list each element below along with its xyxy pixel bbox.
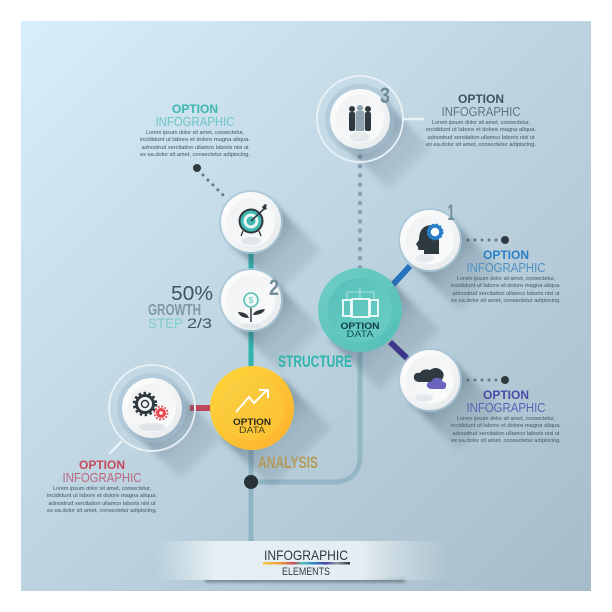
label: option data	[340, 321, 380, 340]
text block: target	[140, 102, 250, 158]
icon: people	[349, 105, 371, 131]
icon: growth plant: $	[249, 296, 254, 305]
node: target	[219, 190, 322, 293]
text block: gears: adnostrud xercitation ullamco laboris nisi ut	[48, 501, 156, 507]
node: plant	[219, 268, 322, 371]
growth stat: 50%	[171, 283, 213, 305]
step numbers: 2	[269, 275, 279, 300]
text block: cloud: Lorem ipsum dolor sit amet, consectetur,	[457, 416, 555, 422]
text block: target: ex ea.dolor sit amet, consectetur adipiscing.	[140, 152, 250, 158]
leader: head	[468, 236, 509, 244]
node: people	[317, 76, 431, 190]
label: option data: OPTION	[340, 321, 380, 332]
footer title: INFOGRAPHIC	[264, 547, 348, 563]
text block: target: INFOGRAPHIC	[156, 115, 234, 129]
connector lines	[190, 157, 411, 541]
node: cloud	[398, 348, 501, 451]
text block: gears: OPTION	[79, 458, 125, 472]
step numbers: 3	[380, 83, 390, 108]
step numbers	[269, 83, 454, 300]
step numbers: 1	[448, 200, 454, 225]
text block: gears	[47, 458, 157, 514]
icon: clouds	[414, 368, 446, 389]
icon: gears	[134, 393, 168, 420]
heading: analysis: ANALYSIS	[258, 453, 318, 472]
text block: head: INFOGRAPHIC	[466, 261, 546, 275]
text block: head: adnostrud xercitation ullamco laboris nisi ut	[452, 291, 560, 297]
text block: people: incididunt ut labore et dolore magna aliqua.	[426, 127, 536, 133]
node: yellow option data	[210, 366, 332, 488]
node: head	[398, 208, 501, 311]
text block: cloud: ex ea.dolor sit amet, consectetur adipiscing.	[451, 438, 561, 444]
node: teal option data	[318, 268, 440, 390]
growth stat: 2/3	[187, 315, 212, 331]
text block: gears: ex ea.dolor sit amet, consectetur adipiscing.	[47, 508, 157, 514]
text block: gears: incididunt ut labore et dolore magna aliqua.	[47, 493, 157, 499]
text block: head: ex ea.dolor sit amet, consectetur adipiscing.	[451, 298, 561, 304]
label: option data	[233, 417, 271, 436]
text block: cloud: OPTION	[483, 388, 529, 402]
junction dot	[244, 475, 258, 489]
text block: head	[451, 248, 561, 304]
heading: structure: STRUCTURE	[278, 352, 352, 371]
text block: people: OPTION	[458, 92, 504, 106]
text block: target: adnostrud xercitation ullamco laboris nisi ut	[142, 145, 249, 151]
colored rule	[263, 562, 350, 564]
text block: people: ex ea.dolor sit amet, consectetur adipiscing.	[426, 142, 536, 148]
growth stat	[148, 283, 213, 331]
text block: target: incididunt ut labore et dolore magna aliqua.	[140, 137, 250, 143]
icon: target	[238, 204, 267, 236]
leader: target	[193, 164, 224, 196]
text block: gears: INFOGRAPHIC	[62, 471, 142, 485]
growth stat: STEP	[148, 315, 183, 331]
text block: head: OPTION	[483, 248, 529, 262]
footer subtitle: ELEMENTS	[282, 566, 330, 578]
footer band	[155, 541, 450, 582]
icon: rising arrow	[236, 390, 268, 412]
text block: people	[426, 92, 536, 148]
text block: cloud: INFOGRAPHIC	[466, 401, 546, 415]
label: option data: DATA	[346, 329, 374, 340]
text block: target: OPTION	[172, 102, 218, 116]
text block: cloud: incididunt ut labore et dolore magna aliqua.	[451, 423, 561, 429]
icon: head with gear	[416, 224, 442, 254]
label: option data: OPTION	[233, 417, 271, 428]
growth stat: GROWTH	[148, 302, 201, 319]
text block: people: adnostrud xercitation ullamco laboris nisi ut	[428, 135, 535, 141]
leader: cloud	[468, 376, 509, 384]
text block: people: Lorem ipsum dolor sit amet, consectetur,	[432, 120, 530, 126]
text block: people: INFOGRAPHIC	[442, 105, 520, 119]
text block: head: incididunt ut labore et dolore magna aliqua.	[451, 283, 561, 289]
text block: cloud	[451, 388, 561, 444]
text block: cloud: adnostrud xercitation ullamco laboris nisi ut	[452, 431, 560, 437]
label: option data: DATA	[239, 425, 266, 436]
node: gears	[109, 365, 223, 479]
text block: head: Lorem ipsum dolor sit amet, consectetur,	[457, 276, 555, 282]
text block: gears: Lorem ipsum dolor sit amet, consectetur,	[53, 486, 151, 492]
icon: structure	[343, 288, 378, 317]
text block: target: Lorem ipsum dolor sit amet, consectetur,	[146, 130, 244, 136]
